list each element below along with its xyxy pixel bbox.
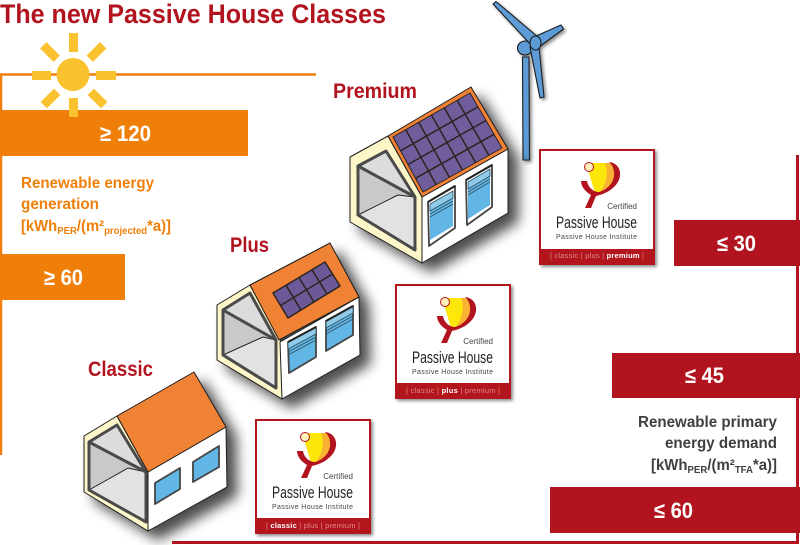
text: renewable primary energy demand <box>638 414 777 476</box>
text: renewable energy generation: Renewable energy <box>21 175 154 192</box>
text: renewable energy generation: [kWh <box>21 218 59 235</box>
label: Plus: Plus <box>230 234 269 257</box>
text: renewable primary energy demand: [kWh <box>651 457 689 474</box>
badge: Classic: Certified <box>323 472 353 481</box>
label: Premium: Premium <box>333 80 417 103</box>
bar: generation 60: ≥ 60 <box>44 265 83 290</box>
text: renewable energy generation: generation <box>21 196 99 213</box>
orange frame line <box>1 74 316 455</box>
bar: generation 120: ≥ 120 <box>100 121 151 146</box>
text: renewable energy generation: projected <box>104 226 147 237</box>
badge: Classic: | classic | plus | premium | <box>266 521 360 530</box>
text: renewable energy generation: *a)] <box>147 218 171 235</box>
text: renewable energy generation: PER <box>57 226 78 237</box>
bar: demand 45: ≤ 45 <box>685 363 724 388</box>
icon: sun <box>32 33 116 117</box>
text: renewable primary energy demand: energy demand <box>665 435 777 452</box>
badge: Premium: Passive House Institute <box>556 234 637 241</box>
bar: demand 30: ≤ 30 <box>717 231 756 256</box>
badge: Plus: Passive House <box>412 348 493 367</box>
text: renewable primary energy demand: TFA <box>735 465 753 476</box>
badge: Plus: Passive House Institute <box>412 369 493 376</box>
badge: Premium: | classic | plus | premium | <box>550 251 644 260</box>
badge: Classic <box>255 419 371 534</box>
badge: Classic: Passive House Institute <box>272 504 353 511</box>
bar: demand 45 <box>612 353 800 398</box>
badge: Plus: | classic | plus | premium | <box>406 386 500 395</box>
badge: Premium: Passive House <box>556 213 637 232</box>
house: Premium <box>350 87 508 263</box>
red frame line <box>172 155 798 542</box>
text: renewable energy generation <box>21 175 171 237</box>
bar: demand 60: ≤ 60 <box>654 498 693 523</box>
badge: Classic: Passive House <box>272 483 353 502</box>
house: Classic <box>84 372 227 531</box>
bar: demand 30 <box>674 220 800 266</box>
bar: generation 120 <box>0 110 248 156</box>
bar: generation 60 <box>0 254 125 300</box>
badge: Plus <box>395 284 511 399</box>
badge: Premium <box>539 149 655 265</box>
solar panels: Premium <box>393 93 502 192</box>
text: renewable energy generation: /(m² <box>77 218 104 235</box>
text: renewable primary energy demand: Renewable primary <box>638 414 777 431</box>
text: renewable primary energy demand: *a)] <box>753 457 777 474</box>
label: Classic: Classic <box>88 358 153 381</box>
text: renewable primary energy demand: /(m² <box>707 457 735 474</box>
house: Plus <box>217 243 360 399</box>
icon: wind turbine <box>493 2 564 160</box>
solar panels: Plus <box>273 262 340 318</box>
bar: demand 60 <box>550 487 800 533</box>
badge: Premium: Certified <box>607 202 637 211</box>
badge: Plus: Certified <box>463 337 493 346</box>
text: renewable primary energy demand: PER <box>688 465 708 476</box>
